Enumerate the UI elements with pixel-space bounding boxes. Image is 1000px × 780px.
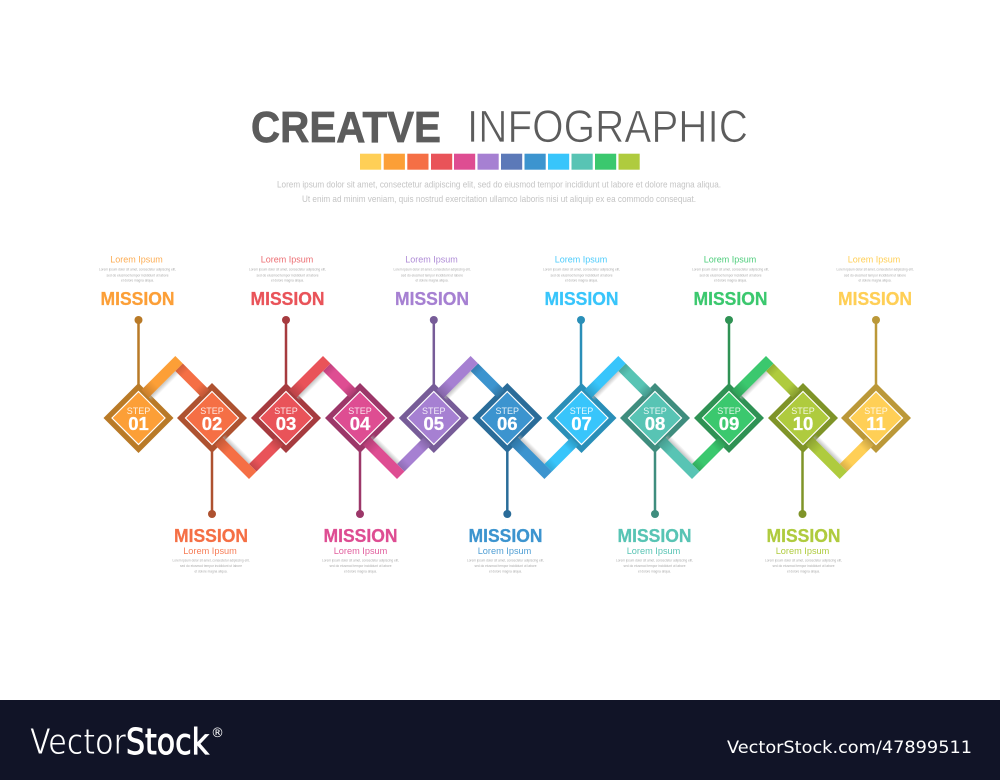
top label: step 03: et dolore magna aliqua. (271, 278, 304, 282)
step diamonds (104, 383, 911, 453)
top label: step 11: Lorem ipsum dolor sit amet, consectetur adipiscing elit, (836, 266, 914, 272)
top label: step 01 (99, 254, 176, 309)
ribbon peak 7-8 (584, 356, 652, 401)
ribbon valley 6-7 (510, 434, 578, 479)
top label: step 03: Lorem ipsum dolor sit amet, consectetur adipiscing elit, (249, 266, 326, 272)
top label: step 09: et dolore magna aliqua. (714, 278, 747, 282)
step 10 (768, 383, 838, 453)
top label: step 07: et dolore magna aliqua. (565, 278, 598, 282)
ribbon peak 9-10 (732, 356, 800, 401)
top label: step 07: MISSION (544, 288, 618, 309)
footer id text: VectorStock.com/47899511 (727, 738, 972, 758)
step 07: 07 (571, 413, 592, 434)
bottom label: step 08: sed do eiusmod tempor incididunt ut labore (624, 563, 686, 568)
bottom label: step 02 (172, 525, 250, 574)
step 03: STEP (274, 406, 298, 416)
subtitle text: Lorem ipsum dolor sit amet, consectetur adipiscing elit, sed do eiusmod tempor incididunt ut labore et dolore magna aliqua. (277, 180, 721, 190)
top label: step 03 (249, 254, 326, 309)
subtitle text (277, 180, 721, 205)
top label: step 11: MISSION (838, 288, 912, 309)
step 09 (694, 383, 764, 453)
bottom label: step 04: Lorem Ipsum (334, 546, 388, 556)
top label: step 09: Lorem ipsum dolor sit amet, consectetur adipiscing elit, (692, 266, 769, 272)
ribbon peak 3-4 (289, 356, 357, 401)
title: CREATVE (251, 103, 441, 152)
top label: step 01: sed do eiusmod tempor incididunt ut labore (106, 272, 169, 278)
subtitle text: Ut enim ad minim veniam, quis nostrud exercitation ullamco laboris nisi ut aliquip ex ea commodo consequat. (302, 194, 696, 205)
top label: step 01: MISSION (100, 288, 174, 309)
bottom label: step 04 (322, 525, 399, 574)
bottom label: step 02: sed do eiusmod tempor incididunt ut labore (180, 563, 243, 568)
bottom label: step 02: et dolore magna aliqua. (194, 568, 228, 574)
footer logo (30, 722, 224, 763)
bottom label: step 06: sed do eiusmod tempor incididunt ut labore (474, 563, 537, 568)
step 06: STEP (496, 406, 519, 416)
bottom label: step 10: sed do eiusmod tempor incididunt ut labore (772, 563, 835, 568)
bottom label: step 04: MISSION (324, 525, 398, 546)
ribbon valley 4-5 (363, 434, 431, 479)
step 09: 09 (719, 413, 739, 434)
top label: step 09: MISSION (694, 288, 768, 309)
bottom label: step 08: MISSION (618, 525, 692, 546)
top label: step 07 (543, 254, 620, 309)
footer logo: Vector (30, 722, 126, 763)
bottom label: step 02: Lorem Ipsum (183, 546, 237, 556)
top label: step 07: sed do eiusmod tempor incididunt ut labore (550, 272, 613, 278)
step 11: 11 (866, 413, 886, 434)
title: INFOGRAPHIC (467, 101, 748, 152)
step 01 (104, 383, 174, 453)
top label: step 11: Lorem Ipsum (848, 254, 900, 264)
top label: step 05: Lorem ipsum dolor sit amet, consectetur adipiscing elit, (394, 266, 470, 272)
step 04 (325, 383, 395, 453)
top label: step 11: et dolore magna aliqua. (858, 278, 892, 282)
step 02 (177, 383, 247, 453)
top label: step 03: Lorem Ipsum (261, 254, 313, 264)
ribbon peak 1-2 (141, 356, 209, 401)
step 07 (546, 383, 616, 453)
bottom label: step 06: Lorem ipsum dolor sit amet, consectetur adipiscing elit, (467, 558, 544, 562)
step 02: 02 (202, 413, 222, 434)
top label: step 05: et dolore magna aliqua. (416, 278, 448, 282)
step 09: STEP (717, 406, 741, 416)
bottom label: step 04: et dolore magna aliqua. (344, 568, 377, 574)
top label: step 05 (394, 254, 470, 309)
step 03 (251, 383, 321, 453)
step 06: 06 (497, 413, 518, 434)
bottom label: step 10: et dolore magna aliqua. (787, 568, 820, 574)
bottom label: step 10: Lorem ipsum dolor sit amet, consectetur adipiscing elit, (765, 558, 842, 562)
top label: step 05: sed do eiusmod tempor incididunt ut labore (401, 272, 464, 278)
ribbon valley 2-3 (215, 434, 283, 479)
step 01: 01 (128, 413, 149, 434)
footer logo: Stock (126, 722, 209, 763)
step 02: STEP (200, 406, 224, 416)
step 11: STEP (864, 406, 888, 416)
title (251, 101, 748, 152)
bottom label: step 06: MISSION (468, 525, 542, 546)
step 07: STEP (570, 406, 593, 416)
step 08: 08 (645, 413, 665, 434)
ribbon peak 5-6 (437, 356, 505, 401)
top label: step 11 (836, 254, 914, 309)
step 11 (841, 383, 911, 453)
bottom label: step 06: Lorem Ipsum (478, 546, 532, 556)
step 03: 03 (276, 413, 296, 434)
bottom label: step 08: et dolore magna aliqua. (638, 568, 671, 574)
bottom label: step 06: et dolore magna aliqua. (489, 568, 522, 574)
step 05: STEP (422, 406, 446, 416)
top label: step 05: MISSION (395, 288, 469, 309)
bottom label: step 08: Lorem Ipsum (627, 546, 681, 556)
top label: step 09 (692, 254, 769, 309)
bottom label: step 04: Lorem ipsum dolor sit amet, consectetur adipiscing elit, (322, 558, 399, 562)
step 10: 10 (793, 413, 813, 434)
step 06 (472, 383, 542, 453)
top label: step 03: MISSION (250, 288, 324, 309)
ribbon valley 10-11 (806, 434, 874, 479)
bottom label: step 02: Lorem ipsum dolor sit amet, consectetur adipiscing elit, (172, 558, 250, 562)
ribbon valley 8-9 (658, 434, 726, 479)
step 10: STEP (791, 406, 815, 416)
bottom label: step 08: Lorem ipsum dolor sit amet, consectetur adipiscing elit, (616, 558, 693, 562)
bottom label: step 10: Lorem Ipsum (776, 546, 830, 556)
bottom label: step 02: MISSION (174, 525, 248, 546)
footer logo: ® (211, 726, 224, 741)
top label: step 01: Lorem ipsum dolor sit amet, consectetur adipiscing elit, (99, 266, 176, 272)
top label: step 07: Lorem Ipsum (555, 254, 607, 264)
step 08: STEP (643, 406, 667, 416)
top label: step 03: sed do eiusmod tempor incididunt ut labore (256, 272, 319, 278)
top label: step 07: Lorem ipsum dolor sit amet, consectetur adipiscing elit, (543, 266, 620, 272)
top label: step 05: Lorem Ipsum (405, 254, 458, 264)
top label: step 01: Lorem Ipsum (110, 254, 163, 264)
top label: step 09: sed do eiusmod tempor incididunt ut labore (700, 272, 762, 278)
bottom label: step 10 (765, 525, 842, 574)
colour swatches row (360, 154, 640, 170)
bottom label: step 06 (467, 525, 544, 574)
step 01: STEP (127, 406, 150, 416)
step 04: 04 (350, 413, 371, 434)
step 05: 05 (424, 413, 444, 434)
footer bar (0, 700, 1000, 780)
bottom label: step 04: sed do eiusmod tempor incididunt ut labore (330, 563, 392, 568)
step 04: STEP (348, 406, 372, 416)
top label: step 09: Lorem Ipsum (704, 254, 756, 264)
connector lines and pins (134, 316, 880, 518)
zigzag ribbon (141, 356, 874, 479)
top label: step 11: sed do eiusmod tempor incididunt ut labore (844, 272, 907, 278)
bottom label: step 10: MISSION (766, 525, 840, 546)
step 08 (620, 383, 690, 453)
step 05 (399, 383, 469, 453)
bottom label: step 08 (616, 525, 693, 574)
top label: step 01: et dolore magna aliqua. (121, 278, 154, 282)
